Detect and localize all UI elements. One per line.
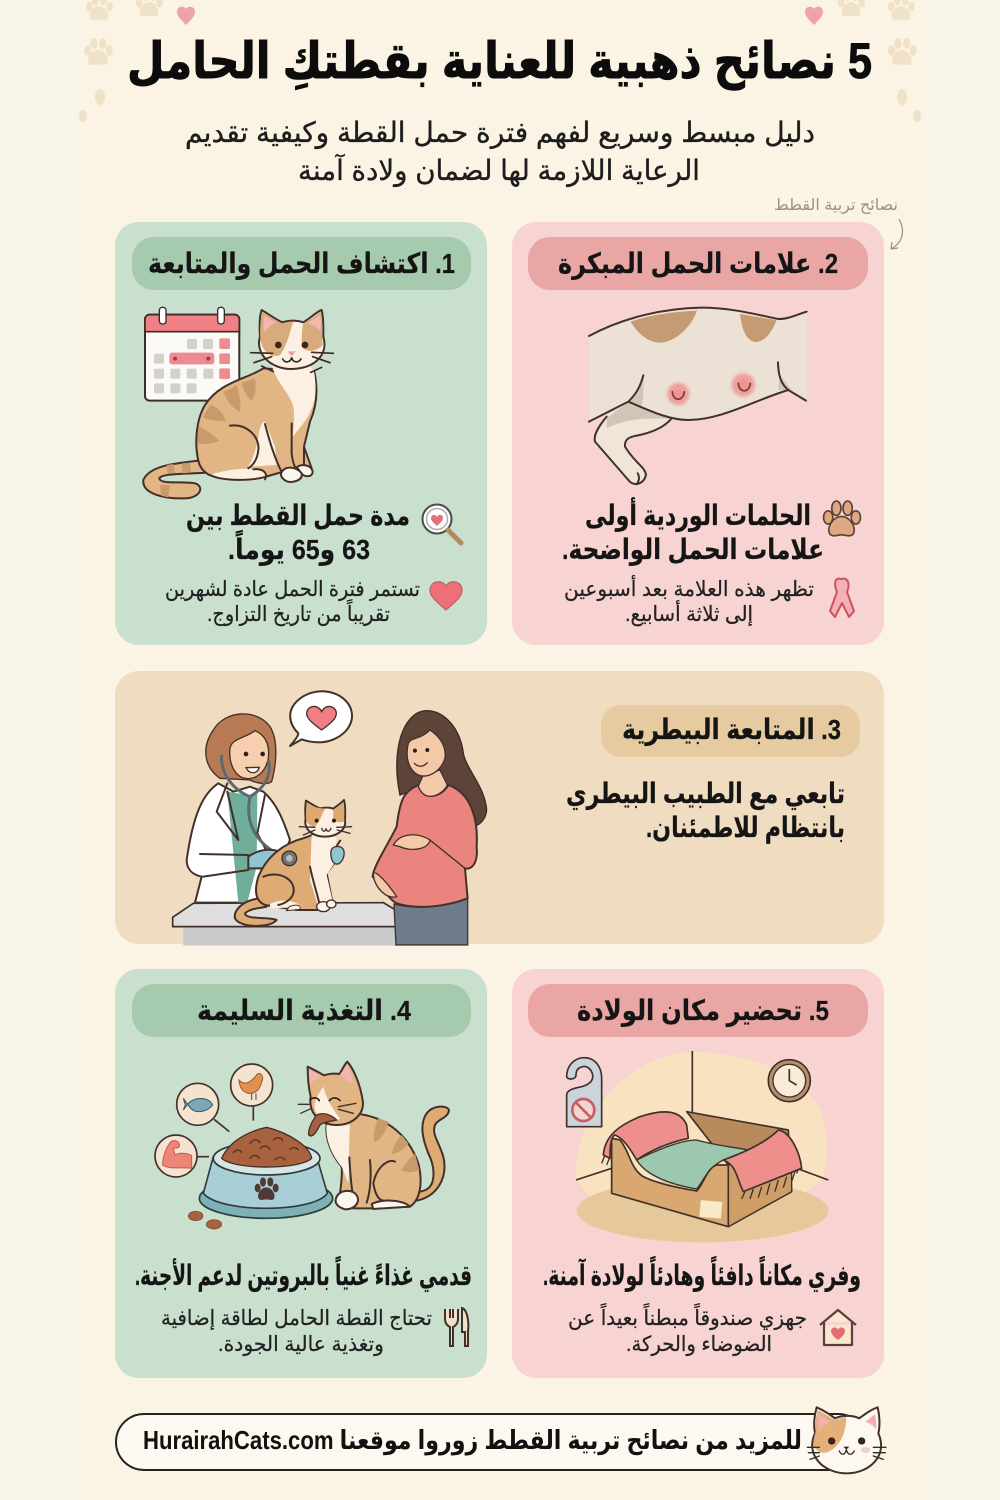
header 1: 1. اكتشاف الحمل والمتابعة [148,248,455,280]
examination table [173,903,407,946]
text: pink nipples: علامات الحمل الواضحة. [562,534,824,566]
nutrient icons [155,1064,273,1177]
header 1 [132,237,471,290]
header 4: 4. التغذية السليمة [197,995,411,1026]
text: pink nipples: الحلمات الوردية أولى [585,497,811,532]
icon: paw [824,501,860,536]
note 5: الضوضاء والحركة. [626,1333,772,1356]
icon: heart [430,582,462,610]
illustration: cat belly [589,308,807,484]
note 2: إلى ثلاثة أسابيع. [625,600,753,627]
cat on table [235,800,352,926]
header 2: 2. علامات الحمل المبكرة [558,248,838,280]
panel 4: nutrition [115,969,487,1378]
panel 1: discovering pregnancy [115,222,487,645]
illustration: vet, cat and owner [173,691,487,946]
small tag with arrow: نصائح تربية القطط [774,197,898,215]
speech bubble [290,691,352,746]
illustration: calendar and cat [143,307,333,498]
small tag with arrow [774,197,902,249]
pregnant owner [373,711,487,945]
decorative paws and hearts [79,0,921,122]
panel 3: vet follow-up [115,671,884,946]
panel 5: birthing place [512,969,884,1378]
note 4: وتغذية عالية الجودة. [218,1333,384,1356]
clock [768,1060,810,1102]
box with blankets [602,1112,802,1227]
note 1 [165,578,420,627]
text: vet advice: بانتظام للاطمئنان. [646,812,845,844]
footer text: للمزيد من نصائح تربية القطط زوروا موقعنا HurairahCats.com [143,1425,802,1456]
header 5 [528,984,868,1037]
note 5: جهزي صندوقاً مبطناً بعيداً عن [568,1302,807,1330]
icon: magnifier with heart [422,504,461,543]
text: gestation [186,500,410,566]
illustration: bowl, nutrients and cat [155,1062,449,1229]
text: protein: قدمي غذاءً غنياً بالبروتين لدعم الأجنة. [135,1255,472,1292]
text: vet advice: تابعي مع الطبيب البيطري [566,778,845,810]
room corner [576,1051,829,1242]
header 4 [132,984,471,1037]
icon: cat face [807,1407,886,1473]
illustration: nesting box [567,1051,829,1242]
food bowl [188,1127,333,1229]
icon: house with heart [820,1310,856,1345]
header 5: 5. تحضير مكان الولادة [577,995,829,1027]
header 3: 3. المتابعة البيطرية [622,714,841,746]
subtitle: دليل مبسط وسريع لفهم فترة حمل القطة وكيفية تقديم [185,117,815,149]
icon: fork and knife [445,1308,468,1346]
eating cat [298,1062,449,1209]
text: gestation: مدة حمل القطط بين [186,500,410,532]
note 2 [564,575,814,627]
vet [187,714,290,903]
note 4 [161,1307,432,1356]
header 2 [528,237,868,290]
header 3 [601,705,860,757]
note 1: تستمر فترة الحمل عادة لشهرين [165,578,420,601]
subtitle: الرعاية اللازمة لها لضمان ولادة آمنة [298,154,700,187]
panel 2: early signs [512,222,884,645]
do not disturb hanger [567,1058,602,1127]
note 2: تظهر هذه العلامة بعد أسبوعين [564,575,814,601]
text: gestation: 63 و65 يوماً. [228,529,370,566]
footer bar [116,1407,886,1473]
icon: ribbon [830,579,854,617]
title: 5 نصائح ذهبية للعناية بقطتكِ الحامل [127,33,872,91]
subtitle [185,117,815,187]
text: pink nipples [562,497,824,566]
note 5 [568,1302,807,1356]
note 4: تحتاج القطة الحامل لطاقة إضافية [161,1307,432,1331]
text: vet advice [566,778,845,844]
note 1: تقريباً من تاريخ التزاوج. [207,598,390,627]
